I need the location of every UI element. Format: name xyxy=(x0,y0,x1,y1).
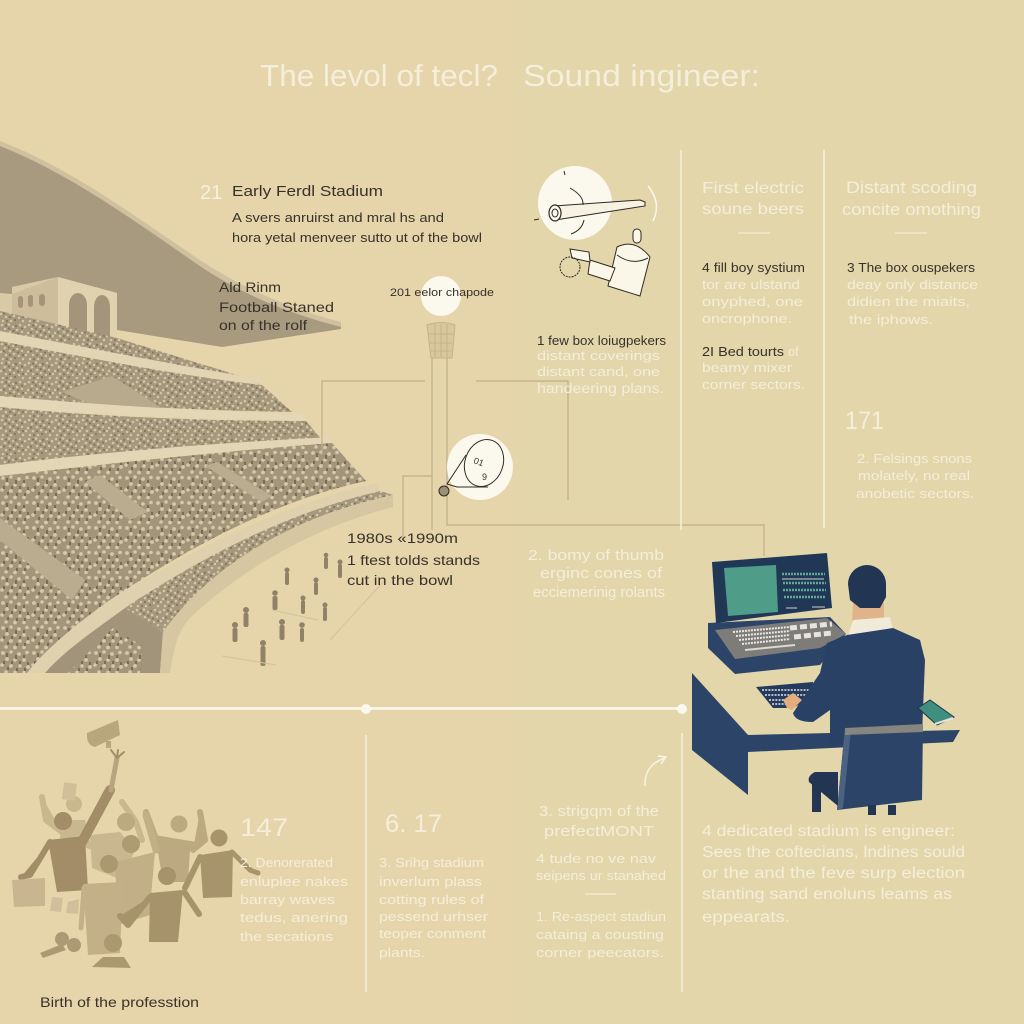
panel: first electric sound: beamy mixer xyxy=(702,360,793,375)
text block: stadium prefect: 3. strigqm of the xyxy=(539,803,659,820)
lower seating section xyxy=(45,608,163,673)
monitor xyxy=(712,553,832,623)
panel: distant seating: 2. Felsings snons xyxy=(857,451,973,466)
phone xyxy=(918,700,954,725)
text block: dedicated engineer: Sees the coftecians, lndines sould xyxy=(702,844,965,861)
panel: first electric sound: soune beers xyxy=(702,201,804,218)
text block: rule of thumb: ecciemerinig rolants xyxy=(533,585,665,601)
person: centre xyxy=(115,815,156,925)
engineer figure xyxy=(783,565,925,747)
text block: stadium prefect: 1. Re-aspect stadiun xyxy=(536,909,666,924)
ledge 4 xyxy=(27,599,112,673)
icon: horn speaker on pole xyxy=(427,322,455,358)
text block: rule of thumb: 2. bomy of thumb xyxy=(528,548,664,564)
text block: stadium prefect: 4 tude no ve nav xyxy=(536,851,657,866)
timeline xyxy=(0,704,687,714)
text block: dedicated engineer: stanting sand enoluns leams as xyxy=(702,886,952,903)
column divider lines xyxy=(366,150,927,992)
text block: rule of thumb xyxy=(528,548,665,601)
text block: 147: tedus, anering xyxy=(240,910,348,925)
text block: early stadium: 21 xyxy=(200,182,222,204)
panel: first electric sound: corner sectors. xyxy=(702,377,805,392)
illustration: sound engineer at desk xyxy=(692,553,960,815)
panel: first electric sound xyxy=(702,180,805,392)
text block: stadium prefect: seipens ur stanahed xyxy=(536,868,666,883)
text block: 6.17: cotting rules of xyxy=(379,892,484,907)
tier 2 crowd xyxy=(0,341,292,412)
panel: distant seating: concite omothing xyxy=(842,201,981,219)
icon: loudspeaker in white circle: 01 xyxy=(472,455,485,468)
text block: early stadium: hora yetal menveer sutto ut of the bowl xyxy=(232,230,482,245)
connector lines xyxy=(322,358,764,556)
text block: football stand: Ald Rinm xyxy=(219,279,281,295)
text block: 1980s: cut in the bowl xyxy=(347,572,453,588)
text block: box loudspeakers: distant cand, one xyxy=(537,364,660,379)
text block: box loudspeakers xyxy=(537,334,666,396)
field wall xyxy=(160,495,393,673)
keyboard xyxy=(756,682,813,708)
person: lower middle xyxy=(81,855,123,955)
text block: early stadium xyxy=(200,182,482,245)
person: foreground xyxy=(92,934,131,968)
stadium roof xyxy=(0,143,341,347)
panel: distant seating: molately, no real xyxy=(858,468,970,483)
text block: box loudspeakers: distant coverings xyxy=(537,348,661,363)
megaphone xyxy=(87,720,120,748)
tier 5 crowd xyxy=(125,491,393,632)
title xyxy=(260,58,760,93)
arrow xyxy=(645,756,666,786)
icon: glowing lamp with label: 201 eelor chapode xyxy=(390,287,494,299)
person: right dark xyxy=(185,830,258,898)
panel: first electric sound: onyphed, one xyxy=(702,294,803,309)
icon: microphone in circle xyxy=(534,166,657,240)
panel: distant seating: deay only distance xyxy=(847,277,978,292)
stadium building with arches xyxy=(0,277,117,336)
text block: 6.17: 6. 17 xyxy=(385,810,442,838)
text block: 147: enluplee nakes xyxy=(240,874,349,889)
ledge 2 xyxy=(0,396,306,420)
text block: 147: 2. Denorerated xyxy=(240,855,333,870)
ledge 3 xyxy=(0,437,332,476)
text block: early stadium: Early Ferdl Stadium xyxy=(232,183,383,200)
illustration: cheering crowd silhouettes xyxy=(12,720,258,968)
person: lower right xyxy=(120,867,199,942)
text block: football stand xyxy=(219,279,334,333)
ledge 1 xyxy=(0,331,262,384)
icon: loudspeaker in white circle xyxy=(439,434,513,500)
papers xyxy=(50,897,79,914)
pitch lines xyxy=(222,580,385,665)
text block: 1980s: 1980s «1990m xyxy=(347,530,458,546)
pitch players xyxy=(232,553,342,666)
caption: birth of the profession: Birth of the professtion xyxy=(40,994,199,1010)
text block: dedicated engineer: 4 dedicated stadium is engineer: xyxy=(702,823,955,840)
tier 4 crowd xyxy=(0,443,366,673)
text block: dedicated engineer: or the and the feve surp election xyxy=(702,865,965,882)
text block: 6.17: inverlum plass xyxy=(379,874,483,889)
text block: stadium prefect: corner peecators. xyxy=(536,945,664,960)
tier 2 aisle xyxy=(62,376,165,410)
text block: 1980s xyxy=(347,530,480,588)
person: back right xyxy=(146,812,205,882)
mixing console xyxy=(708,617,846,674)
text block: early stadium: A svers anruirst and mral hs and xyxy=(232,210,444,225)
person: raised arm dark xyxy=(21,750,124,892)
text block: 147: 147 xyxy=(240,814,288,842)
engineer hand xyxy=(783,693,802,710)
panel: distant seating xyxy=(842,179,981,501)
roof edge xyxy=(0,141,341,327)
text block: 6.17 xyxy=(379,810,489,960)
text block: 147 xyxy=(240,814,349,944)
text block: football stand: on of the rolf xyxy=(219,317,307,333)
text block: dedicated engineer: eppearats. xyxy=(702,909,790,926)
upper tier crowd xyxy=(0,311,260,384)
text block: box loudspeakers: 1 few box loiugpekers xyxy=(537,334,666,348)
panel: distant seating: Distant scoding xyxy=(846,179,977,197)
aisle stairs xyxy=(0,462,272,600)
icon: loudspeaker in white circle: 9 xyxy=(482,472,487,482)
panel: first electric sound: oncrophone. xyxy=(702,311,792,326)
text block: 147: the secations xyxy=(240,929,334,944)
panel: distant seating: 171 xyxy=(845,407,884,435)
text block: 147: barray waves xyxy=(240,892,336,907)
lower crowd xyxy=(68,628,142,673)
person: centre rear xyxy=(90,802,142,880)
text block: stadium prefect: cataing a cousting xyxy=(536,927,664,942)
panel: distant seating: 3 The box ouspekers xyxy=(847,261,975,275)
text block: 6.17: pessend urhser xyxy=(379,909,489,924)
desk xyxy=(692,673,960,795)
panel: first electric sound: 2I Bed tourts xyxy=(702,345,784,359)
text block: dedicated engineer xyxy=(702,823,965,926)
text block: 1980s: 1 ftest tolds stands xyxy=(347,552,480,568)
text block: rule of thumb: erginc cones of xyxy=(540,566,663,582)
panel: first electric sound: tor are ulstand xyxy=(702,277,800,292)
icon: glowing lamp with label xyxy=(390,276,494,316)
panel: first electric sound: 4 fill boy systium xyxy=(702,261,805,275)
tier 3 crowd xyxy=(0,407,322,465)
text block: box loudspeakers: handeering plans. xyxy=(537,381,664,396)
icon: stage speaker device xyxy=(560,229,650,296)
panel: distant seating: the iphows. xyxy=(849,312,933,327)
text block: 6.17: plants. xyxy=(379,945,425,960)
panel: distant seating: anobetic sectors. xyxy=(856,486,974,501)
person: back left xyxy=(42,782,92,850)
briefcase xyxy=(12,878,45,907)
text block: stadium prefect: prefectMONT xyxy=(544,823,654,840)
text block: 6.17: teoper conment xyxy=(379,926,486,941)
panel: first electric sound: of xyxy=(788,345,799,359)
panel: distant seating: didien the miaits, xyxy=(847,294,970,309)
office chair xyxy=(809,724,923,815)
text block: 6.17: 3. Srihg stadium xyxy=(379,855,484,870)
text block: stadium prefect xyxy=(536,803,666,960)
illustration: stadium bowl with crowd xyxy=(0,141,393,673)
title: Sound ingineer: xyxy=(523,58,760,93)
title: The levol of tecl? xyxy=(260,58,498,93)
panel: first electric sound: First electric xyxy=(702,180,804,197)
dropped microphone xyxy=(40,932,81,958)
text block: football stand: Football Staned xyxy=(219,299,334,315)
